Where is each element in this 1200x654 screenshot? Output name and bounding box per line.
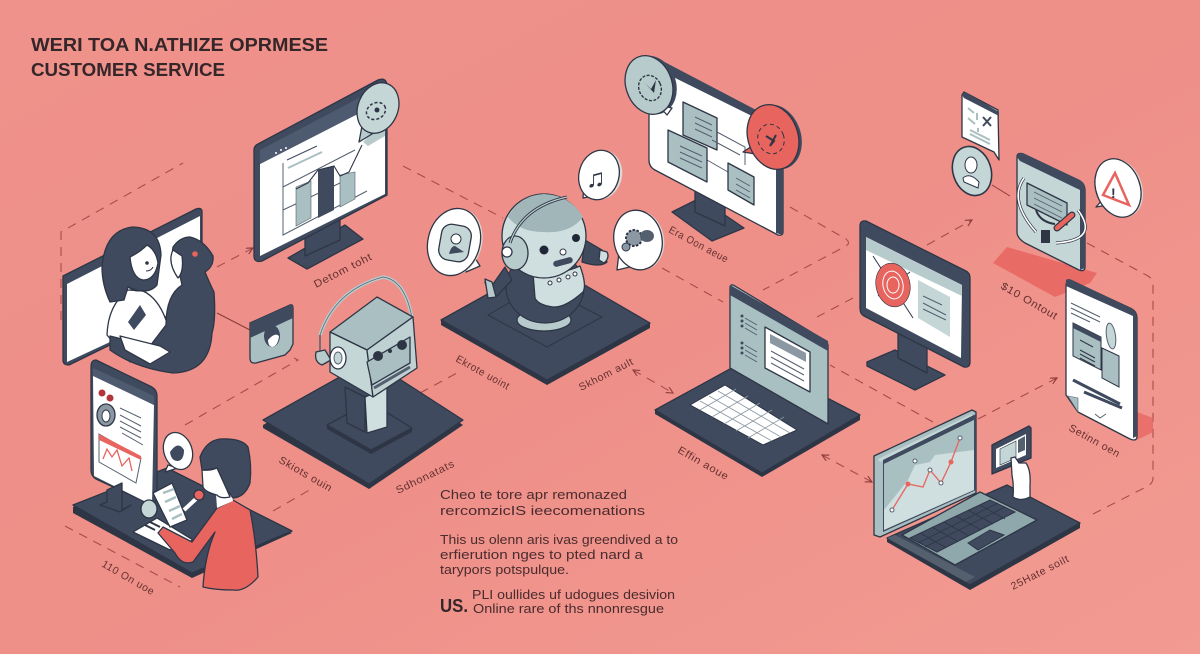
illustration: person at desk with phone — [73, 360, 292, 590]
torso: left woman — [107, 290, 172, 362]
icon: gear bubble — [608, 206, 670, 274]
label: Ekrote uoint — [454, 353, 512, 393]
text block: recommendations — [440, 488, 678, 616]
label: $10 Ontout — [998, 280, 1060, 323]
monitor: workflow screen — [649, 57, 783, 241]
label: Skiots ouin — [276, 454, 334, 495]
text block: recommendations: PLI oullides uf udogues desivion — [472, 588, 675, 602]
monitor: target screen — [860, 221, 970, 390]
text block: recommendations: US. — [440, 596, 468, 616]
title — [31, 35, 328, 80]
hair: left woman — [102, 227, 161, 302]
illustration: analytics laptop — [874, 410, 1080, 590]
icon: chat badge — [250, 305, 293, 363]
icon: music note bubble: ♫ — [586, 163, 606, 193]
title: CUSTOMER SERVICE — [31, 60, 225, 80]
title: WERI TOA N.ATHIZE OPRMESE — [31, 35, 328, 55]
icon: music note bubble — [573, 145, 628, 205]
label: Detom toht — [312, 251, 374, 291]
icon: person bubble — [420, 202, 490, 282]
text block: recommendations: erfierution nges to pted nard a — [440, 548, 643, 562]
text block: recommendations: rercomzicIS ieecomenations — [440, 504, 645, 518]
right woman — [110, 237, 215, 373]
illustration: box robot on platform — [263, 277, 463, 489]
label: Effin aoue — [676, 444, 731, 483]
text block: recommendations: This us olenn aris ivas greendived a to — [440, 533, 678, 547]
illustration: central robot on platform — [441, 194, 650, 385]
icon: card with pointing hand — [992, 426, 1031, 500]
icon: warning bubble — [1087, 152, 1151, 224]
text block: recommendations: tarypors potspulque. — [440, 563, 569, 577]
illustration: red floor tile — [993, 247, 1097, 297]
illustration: document phone — [1066, 279, 1153, 440]
icon: support agent avatar — [946, 141, 998, 201]
icon: document card — [962, 92, 999, 160]
icon: red gear bubble — [739, 98, 810, 176]
icon: teal gear bubble — [617, 49, 685, 121]
icon: speech bubble — [158, 428, 198, 474]
text block: recommendations: Cheo te tore apr remonazed — [440, 488, 627, 502]
icon: warning bubble: ! — [1111, 185, 1116, 201]
monitor: bar chart dashboard — [254, 79, 387, 269]
label: Skhom ault — [577, 356, 636, 394]
illustration: tablet with headset — [1017, 153, 1085, 271]
illustration: laptop with keyboard — [655, 285, 860, 477]
icon: chart speech bubble — [350, 76, 406, 142]
label: Sdhonatats — [394, 458, 457, 497]
illustration: two people at a window — [63, 208, 215, 373]
label: 110 On uoe — [100, 558, 157, 598]
label: 25Hate soilt — [1009, 553, 1071, 593]
label: Era Oon aeue — [667, 224, 730, 266]
label: Setinn oen — [1067, 422, 1122, 460]
text block: recommendations: Online rare of ths nnonresgue — [473, 602, 664, 616]
connector: dashed network lines — [61, 163, 1153, 587]
